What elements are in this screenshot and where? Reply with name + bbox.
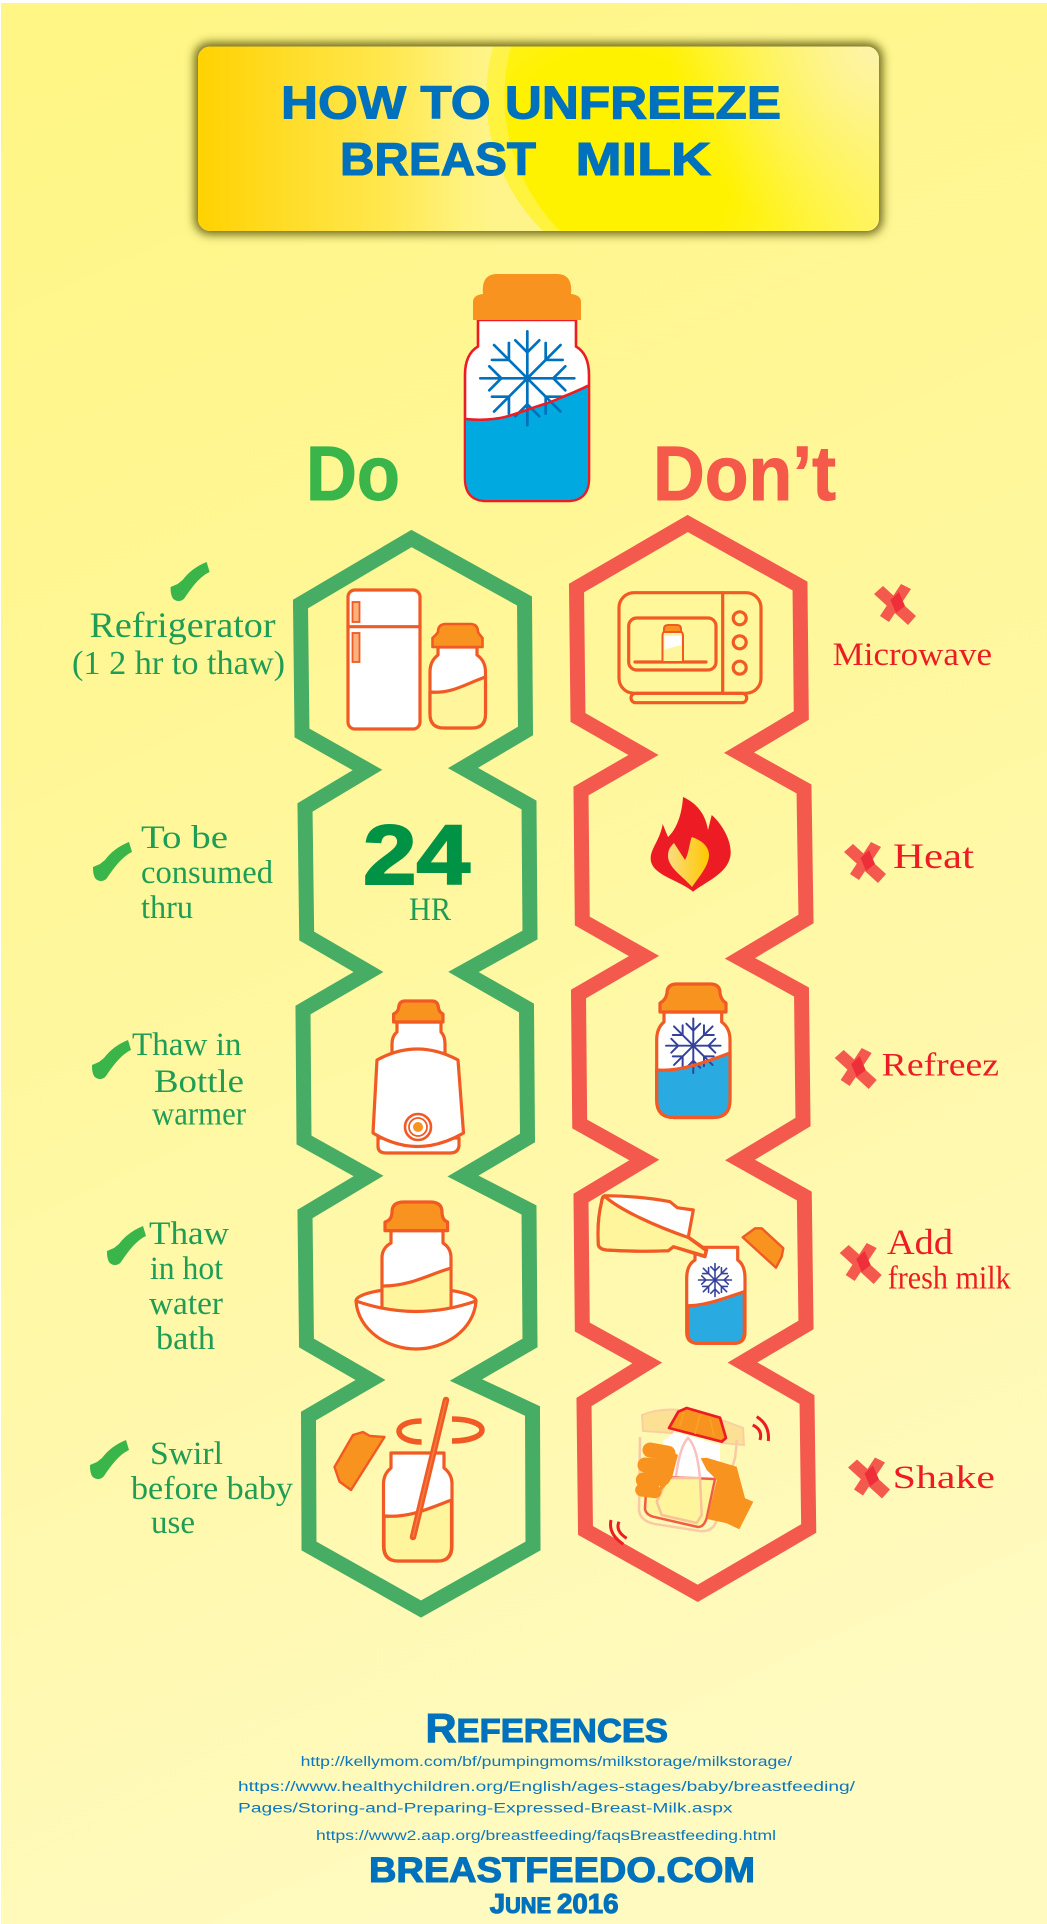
item: shake: Shake — [893, 1460, 995, 1496]
icon: frozen bottle, do not refreeze — [657, 984, 730, 1118]
date: JUNE 2016 — [490, 1888, 619, 1919]
heading: Don't: Don’t — [653, 431, 836, 517]
item: swirl before baby use: use — [151, 1505, 195, 1541]
item: heat — [844, 836, 974, 883]
title text: MILK — [576, 133, 711, 185]
item: to be consumed thru — [93, 820, 273, 926]
item: add fresh milk — [840, 1222, 1011, 1296]
item: heat: Heat — [893, 836, 974, 876]
item: thaw in hot water bath: water — [149, 1286, 223, 1322]
item: swirl before baby use — [90, 1436, 294, 1541]
title text — [281, 76, 781, 185]
references heading: REFERENCES — [426, 1705, 668, 1751]
item: thaw in hot water bath: in hot — [150, 1251, 223, 1287]
item: refrigerator: (1 2 hr to thaw) — [72, 645, 285, 682]
panel: red hexagon chain — [576, 524, 809, 1593]
item: refrigerator: Refrigerator — [90, 605, 276, 645]
item: refrigerator — [72, 562, 285, 682]
item: thaw in bottle warmer: Bottle — [154, 1064, 244, 1100]
heading: Do: Do — [306, 431, 400, 517]
title text: BREAST — [340, 133, 536, 185]
icon: bottle in hot water bowl — [356, 1202, 476, 1349]
panel: green hexagon chain — [300, 538, 533, 1609]
item: microwave: Microwave — [833, 637, 992, 673]
item: thaw in hot water bath: Thaw — [149, 1216, 229, 1252]
icon: microwave — [619, 593, 761, 703]
icon: bottle warmer — [373, 1001, 464, 1153]
item: microwave — [833, 584, 992, 673]
item: thaw in bottle warmer — [92, 1027, 246, 1132]
item: thaw in hot water bath: bath — [156, 1321, 216, 1357]
item: to be consumed thru: consumed — [141, 855, 273, 891]
references links: Pages/Storing-and-Preparing-Expressed-Breast-Milk.aspx — [238, 1801, 733, 1816]
item: shake — [848, 1458, 995, 1498]
item: thaw in bottle warmer: warmer — [152, 1096, 246, 1132]
site name: BREASTFEEDO.COM — [369, 1851, 755, 1890]
item: swirl before baby use: before baby — [131, 1471, 294, 1507]
icon: refrigerator and milk bottle — [348, 590, 486, 729]
item: refreez: Refreez — [882, 1048, 999, 1084]
item: thaw in hot water bath — [107, 1216, 229, 1357]
label: HR: HR — [409, 892, 451, 928]
title banner — [195, 43, 882, 234]
icon: shaking bottle — [611, 1408, 768, 1544]
item: to be consumed thru: thru — [141, 890, 193, 926]
references links: https://www2.aap.org/breastfeeding/faqsBreastfeeding.html — [316, 1828, 776, 1843]
item: swirl before baby use: Swirl — [150, 1436, 223, 1472]
icon: frozen milk bottle — [465, 274, 589, 501]
title text: HOW TO UNFREEZE — [281, 76, 781, 128]
item: refreez — [835, 1048, 999, 1089]
icon: 24: 24 — [363, 808, 470, 902]
item: add fresh milk: Add — [887, 1222, 953, 1262]
references links — [238, 1754, 855, 1843]
icon: flame — [651, 797, 731, 892]
icon: swirl jar with straw and lid — [334, 1400, 482, 1561]
item: to be consumed thru: To be — [141, 820, 228, 856]
item: add fresh milk: fresh milk — [888, 1260, 1011, 1296]
item: thaw in bottle warmer: Thaw in — [132, 1027, 242, 1063]
icon: pouring fresh milk into frozen bottle — [598, 1196, 783, 1343]
references links: http://kellymom.com/bf/pumpingmoms/milkstorage/milkstorage/ — [301, 1754, 792, 1769]
references links: https://www.healthychildren.org/English/ages-stages/baby/breastfeeding/ — [238, 1779, 855, 1794]
